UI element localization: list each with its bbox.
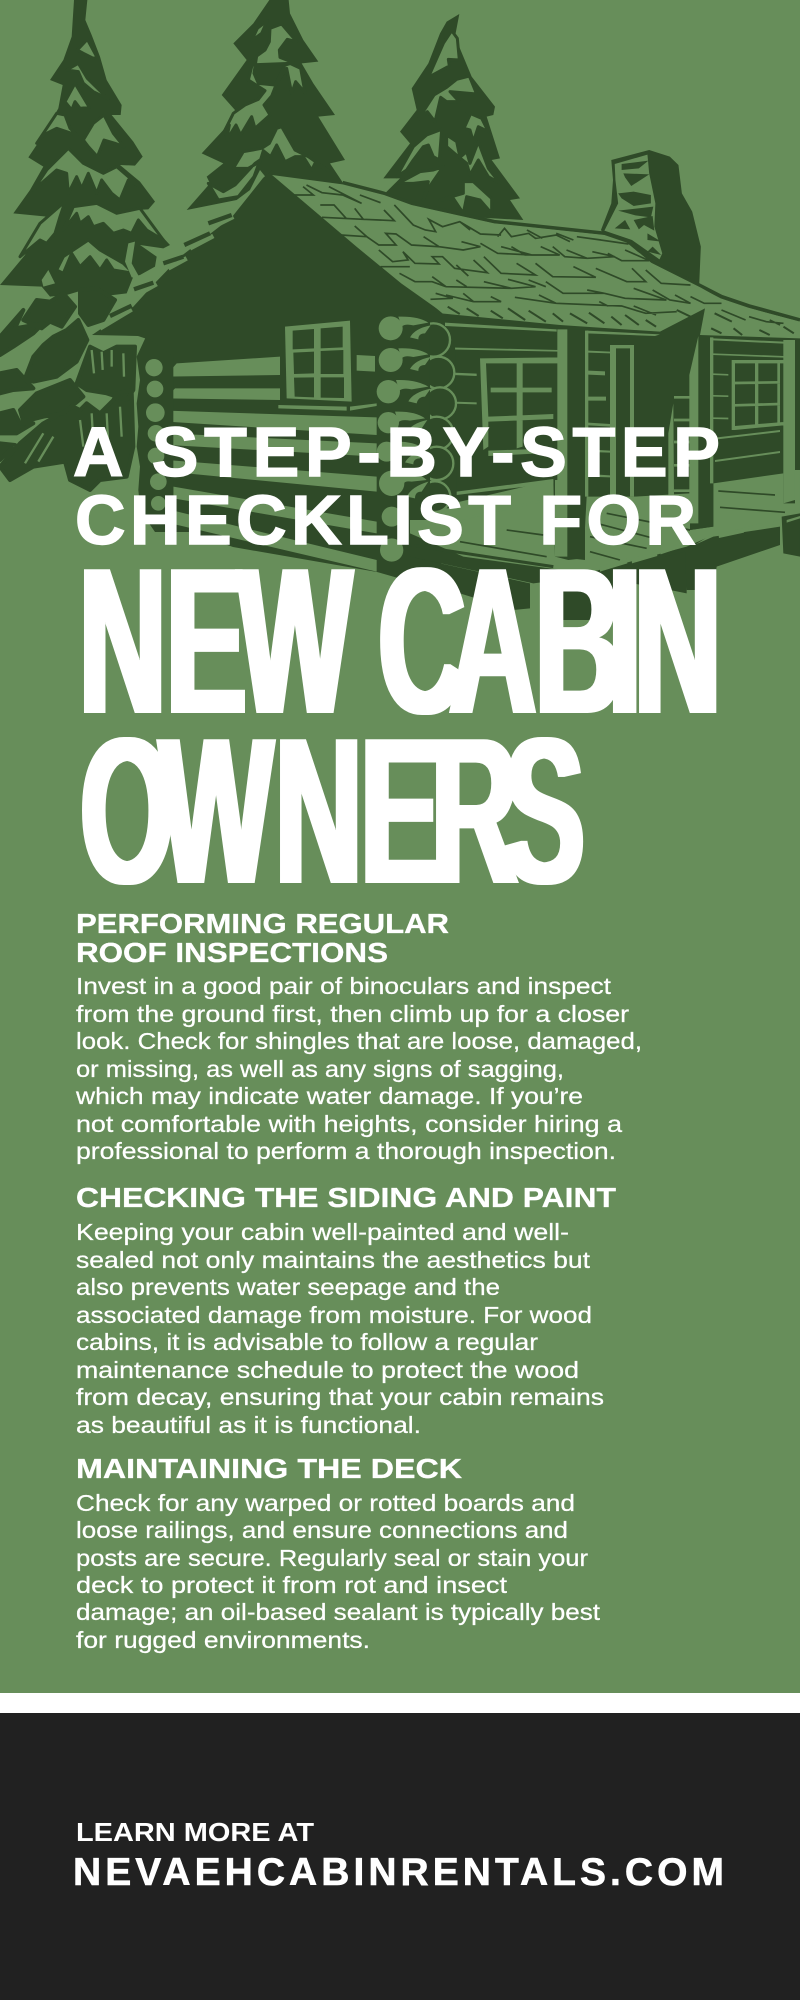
icon: wall log strips <box>165 357 377 572</box>
icon: left log ends <box>137 337 173 530</box>
section: roof inspections <box>75 908 642 1164</box>
title: line one: A STEP-BY-STEP <box>73 413 720 491</box>
body: roof inspections: not comfortable with heights, consider hiring a <box>76 1111 622 1137</box>
icon: gable window <box>278 321 377 411</box>
footer: learn more: LEARN MORE AT <box>76 1817 314 1847</box>
title: line two: CHECKLIST FOR <box>75 481 696 559</box>
icon: side window <box>445 323 660 557</box>
body: maintaining the deck: loose railings, and ensure connections and <box>76 1517 568 1543</box>
body: roof inspections: Invest in a good pair of binoculars and inspect <box>76 973 612 999</box>
heading: roof inspections <box>76 908 449 968</box>
icon: dashed gable trim <box>100 215 233 328</box>
icon: deck fascia and supports <box>410 513 800 620</box>
icon: right side wall and porch <box>400 308 800 620</box>
body: siding and paint: maintenance schedule to protect the wood <box>76 1357 579 1383</box>
icon: gable wall <box>92 170 450 590</box>
body: siding and paint: sealed not only maintains the aesthetics but <box>76 1247 591 1273</box>
section: maintaining the deck <box>76 1453 601 1653</box>
body: siding and paint: cabins, it is advisable to follow a regular <box>76 1329 538 1355</box>
dark footer panel <box>0 1713 800 2000</box>
footer call to action <box>73 1817 724 1894</box>
icon: right pine tree <box>383 14 523 220</box>
body: roof inspections <box>75 973 642 1164</box>
section: siding and paint <box>76 1182 616 1438</box>
icon: left pine tree <box>0 0 170 490</box>
body: maintaining the deck: damage; an oil-based sealant is typically best <box>76 1599 601 1625</box>
body: roof inspections: look. Check for shingles that are loose, damaged, <box>76 1028 642 1054</box>
white divider band <box>0 1693 800 1713</box>
icon: right section wall and window <box>710 337 795 503</box>
icon: porch floor <box>410 470 800 573</box>
heading: siding and paint: CHECKING THE SIDING AND PAINT <box>76 1182 616 1213</box>
heading: maintaining the deck: MAINTAINING THE DECK <box>76 1453 462 1484</box>
body: maintaining the deck: Check for any warped or rotted boards and <box>76 1490 575 1516</box>
body: siding and paint: also prevents water seepage and the <box>76 1274 500 1300</box>
title: OWNERS: OWNERS <box>80 695 585 928</box>
icon: corner log base <box>400 320 457 520</box>
footer: website: NEVAEHCABINRENTALS.COM <box>73 1851 724 1894</box>
icon: left log wall with window <box>137 321 377 572</box>
title: NEW CABIN: NEW CABIN <box>79 525 721 758</box>
body: siding and paint: associated damage from moisture. For wood <box>76 1302 592 1328</box>
icon: front corner logs <box>377 316 431 562</box>
body: siding and paint: as beautiful as it is functional. <box>76 1412 421 1438</box>
heading: roof inspections: PERFORMING REGULAR <box>76 908 449 939</box>
illustration: log cabin and pine trees <box>0 0 800 620</box>
body: maintaining the deck <box>76 1490 601 1653</box>
body: siding and paint: Keeping your cabin well-painted and well- <box>76 1219 569 1245</box>
icon: shingled roof <box>272 175 800 337</box>
icon: middle pine tree <box>187 0 380 210</box>
body: roof inspections: which may indicate water damage. If you’re <box>75 1083 583 1109</box>
icon: porch floor boards <box>460 491 785 560</box>
body: roof inspections: or missing, as well as any signs of sagging, <box>76 1056 564 1082</box>
body: roof inspections: professional to perform a thorough inspection. <box>76 1138 616 1164</box>
heading: roof inspections: ROOF INSPECTIONS <box>76 937 388 968</box>
body: maintaining the deck: deck to protect it from rot and insect <box>76 1572 508 1598</box>
icon: stone chimney <box>601 150 701 287</box>
body: maintaining the deck: for rugged environments. <box>76 1627 370 1653</box>
body: maintaining the deck: posts are secure. Regularly seal or stain your <box>76 1545 588 1571</box>
body: roof inspections: from the ground first, then climb up for a closer <box>76 1001 629 1027</box>
body: siding and paint: from decay, ensuring that your cabin remains <box>76 1384 604 1410</box>
title <box>73 413 721 928</box>
icon: door and porch posts <box>585 331 698 523</box>
body: siding and paint <box>76 1219 604 1438</box>
